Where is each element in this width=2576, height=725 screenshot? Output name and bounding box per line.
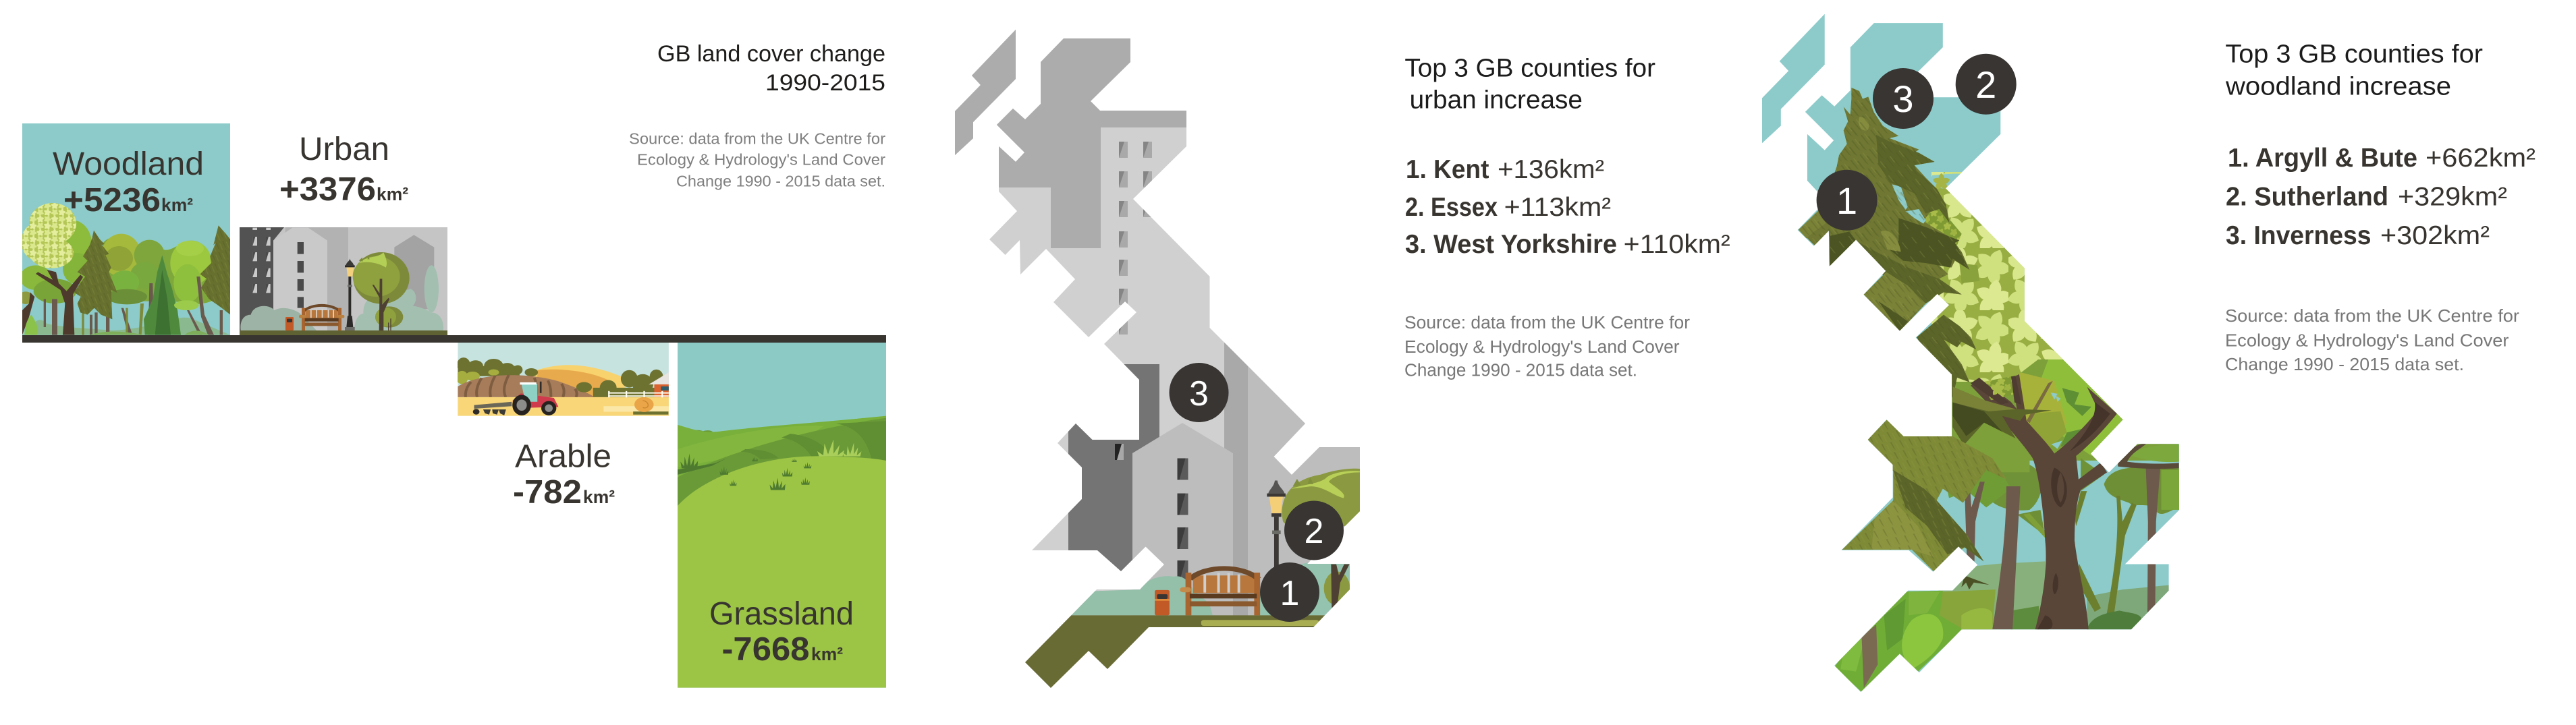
label: Woodland xyxy=(53,146,204,219)
source note: woodland: Change 1990 - 2015 data set. xyxy=(2225,354,2464,374)
list: top urban counties: +136km² xyxy=(1498,155,1604,184)
label: Grassland: Grassland xyxy=(709,596,854,632)
panel: urban increase text xyxy=(1404,54,1730,380)
heading: urban increase xyxy=(1404,54,1655,115)
heading: woodland increase: Top 3 GB counties for xyxy=(2225,40,2483,68)
source note: urban: Ecology & Hydrology's Land Cover xyxy=(1404,338,1680,357)
list: top woodland counties: 1. Argyll & Bute xyxy=(2228,144,2417,173)
source note: land cover: Source: data from the UK Centre for xyxy=(629,129,885,147)
heading: urban increase: Top 3 GB counties for xyxy=(1404,54,1655,82)
bar: grassland illustration xyxy=(678,343,886,688)
list: top urban counties: 2. Essex xyxy=(1405,193,1498,222)
label: Grassland: km² xyxy=(811,644,843,664)
source note: woodland: Source: data from the UK Centre for xyxy=(2225,306,2519,326)
panel: land cover change chart xyxy=(18,41,886,688)
label: Woodland: km² xyxy=(161,195,193,215)
source note: woodland: Ecology & Hydrology's Land Cover xyxy=(2225,330,2509,351)
badge 2: Essex xyxy=(1284,500,1344,560)
source note: urban: Source: data from the UK Centre for xyxy=(1404,314,1691,332)
label: Woodland: Woodland xyxy=(53,146,204,182)
list: top woodland counties xyxy=(2226,144,2536,250)
badge 1: Kent: 1 xyxy=(1280,574,1299,613)
title: GB land cover change xyxy=(657,41,885,96)
panel: woodland increase text xyxy=(2225,40,2536,374)
label: Urban xyxy=(279,132,408,208)
list: top woodland counties: 3. Inverness xyxy=(2226,221,2372,250)
badge 1: Kent xyxy=(1260,562,1319,622)
bar: urban illustration xyxy=(240,226,449,336)
source note: urban xyxy=(1404,314,1691,380)
list: top urban counties: +113km² xyxy=(1504,193,1611,222)
label: Woodland: +5236 xyxy=(63,182,161,219)
source note: urban: Change 1990 - 2015 data set. xyxy=(1404,361,1637,380)
title: GB land cover change: 1990-2015 xyxy=(765,70,885,96)
map: woodland scene clipped to GB outline xyxy=(1762,13,2179,692)
label: Arable: -782 xyxy=(513,474,582,511)
label: Urban: +3376 xyxy=(279,171,376,208)
axis bar xyxy=(22,335,886,343)
badge 3: West Yorkshire: 3 xyxy=(1189,374,1209,413)
badge 3: Inverness: 3 xyxy=(1892,78,1914,120)
badge 2: Essex: 2 xyxy=(1305,512,1323,551)
title: GB land cover change: GB land cover change xyxy=(657,41,885,67)
list: top urban counties xyxy=(1405,155,1730,259)
list: top woodland counties: +329km² xyxy=(2398,182,2507,212)
bar: woodland illustration xyxy=(18,123,230,335)
label: Grassland: -7668 xyxy=(722,631,810,668)
badge 2: Sutherland xyxy=(1956,54,2017,115)
heading: woodland increase: woodland increase xyxy=(2225,73,2451,101)
badge 3: West Yorkshire xyxy=(1169,363,1228,422)
badge 1: Argyll and Bute xyxy=(1817,170,1878,231)
heading: woodland increase xyxy=(2225,40,2483,101)
label: Arable: Arable xyxy=(515,438,611,475)
list: top woodland counties: 2. Sutherland xyxy=(2226,182,2388,212)
label: Arable: km² xyxy=(583,487,615,507)
list: top urban counties: 1. Kent xyxy=(1406,155,1489,184)
list: top woodland counties: +302km² xyxy=(2380,221,2490,250)
badge 2: Sutherland: 2 xyxy=(1975,63,1996,106)
list: top woodland counties: +662km² xyxy=(2426,144,2536,173)
source note: land cover: Change 1990 - 2015 data set. xyxy=(676,173,885,190)
label: Arable xyxy=(513,438,615,511)
label: Grassland xyxy=(709,596,854,668)
badge 1: Argyll and Bute: 1 xyxy=(1836,179,1857,222)
panel: urban map of Great Britain xyxy=(955,30,1360,688)
source note: land cover: Ecology & Hydrology's Land Cover xyxy=(637,151,885,169)
list: top urban counties: 3. West Yorkshire xyxy=(1405,230,1617,259)
list: top urban counties: +110km² xyxy=(1624,230,1730,259)
heading: urban increase: urban increase xyxy=(1410,86,1583,115)
badge 3: Inverness xyxy=(1873,68,1934,129)
source note: woodland xyxy=(2225,306,2519,374)
source note: land cover xyxy=(629,129,885,190)
label: Urban: km² xyxy=(377,184,408,204)
label: Urban: Urban xyxy=(299,132,389,167)
panel: woodland map of Great Britain xyxy=(1762,13,2179,692)
bar: arable illustration xyxy=(456,343,669,416)
map: urban scene clipped to GB outline xyxy=(955,30,1360,688)
